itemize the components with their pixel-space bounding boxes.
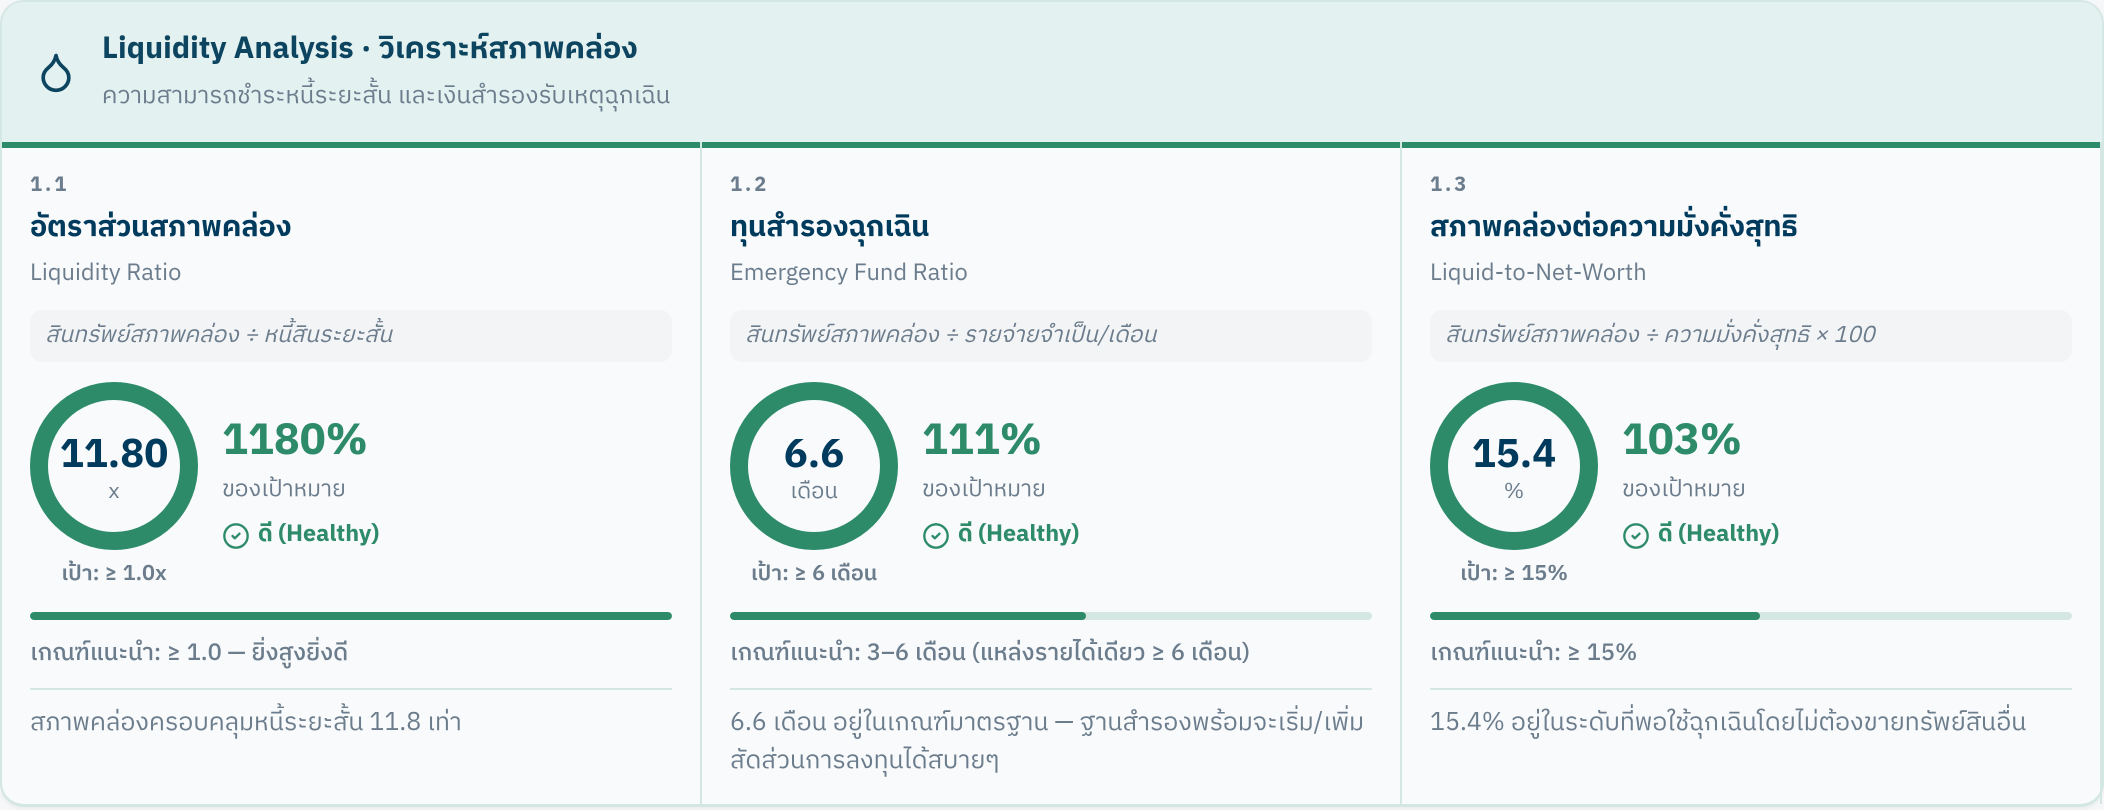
progress bar: [1430, 612, 2072, 620]
gauge value: 6.6: [784, 423, 844, 489]
formula: สินทรัพย์สภาพคล่อง ÷ ความมั่งคั่งสุทธิ × 100: [1445, 317, 1875, 355]
icon: check circle: [923, 523, 949, 549]
english name: Emergency Fund Ratio: [730, 254, 968, 293]
header band: [2, 2, 2102, 148]
status: ดี (Healthy): [258, 516, 379, 554]
gauge unit: %: [1504, 473, 1524, 510]
percent caption: ของเป้าหมาย: [222, 471, 346, 509]
icon: check circle: [223, 523, 249, 549]
status: ดี (Healthy): [958, 516, 1079, 554]
percent caption: ของเป้าหมาย: [1622, 471, 1746, 509]
formula box: [730, 310, 1372, 362]
target: เป้า: ≥ 1.0x: [61, 556, 167, 592]
gauge unit: เดือน: [790, 473, 838, 510]
note: 6.6 เดือน อยู่ในเกณฑ์มาตรฐาน — ฐานสำรองพร้อมจะเริ่ม/เพิ่มสัดส่วนการลงทุนได้สบายๆ: [730, 703, 1364, 782]
progress bar: [30, 612, 672, 620]
metric number: 1.1: [30, 168, 69, 202]
percent caption: ของเป้าหมาย: [922, 471, 1046, 509]
guideline: เกณฑ์แนะนำ: ≥ 15%: [1430, 634, 1637, 673]
status: ดี (Healthy): [1658, 516, 1779, 554]
target: เป้า: ≥ 6 เดือน: [751, 556, 877, 592]
metric heading: สภาพคล่องต่อความมั่งคั่งสุทธิ: [1430, 205, 1798, 252]
metric heading: ทุนสำรองฉุกเฉิน: [730, 205, 929, 252]
panel: liquidity ratio: [30, 168, 672, 744]
note: สภาพคล่องครอบคลุมหนี้ระยะสั้น 11.8 เท่า: [30, 703, 462, 744]
title: Liquidity Analysis · วิเคราะห์สภาพคล่อง: [102, 25, 638, 75]
progress bar: [730, 612, 1372, 620]
icon: check circle: [1623, 523, 1649, 549]
gauge unit: x: [108, 473, 120, 510]
gauge ring: [30, 382, 198, 550]
metric number: 1.3: [1430, 168, 1469, 202]
gauge ring: [1430, 382, 1598, 550]
formula: สินทรัพย์สภาพคล่อง ÷ รายจ่ายจำเป็น/เดือน: [745, 317, 1156, 355]
english name: Liquid-to-Net-Worth: [1430, 254, 1647, 293]
note: 15.4% อยู่ในระดับที่พอใช้ฉุกเฉินโดยไม่ต้องขายทรัพย์สินอื่น: [1430, 703, 2026, 744]
gauge value: 11.80: [60, 423, 168, 489]
percent of target: 111%: [922, 407, 1042, 478]
percent of target: 103%: [1622, 407, 1742, 478]
gauge value: 15.4: [1472, 423, 1556, 489]
subtitle: ความสามารถชำระหนี้ระยะสั้น และเงินสำรองรับเหตุฉุกเฉิน: [102, 76, 670, 116]
formula box: [1430, 310, 2072, 362]
panel: liquid to net worth: [1430, 168, 2072, 744]
formula: สินทรัพย์สภาพคล่อง ÷ หนี้สินระยะสั้น: [45, 317, 392, 355]
metric number: 1.2: [730, 168, 769, 202]
icon: water drop: [41, 54, 71, 92]
panel: emergency fund ratio: [730, 168, 1372, 782]
gauge ring: [730, 382, 898, 550]
percent of target: 1180%: [222, 407, 368, 478]
guideline: เกณฑ์แนะนำ: 3–6 เดือน (แหล่งรายได้เดียว ≥ 6 เดือน): [730, 634, 1250, 673]
formula box: [30, 310, 672, 362]
target: เป้า: ≥ 15%: [1460, 556, 1568, 592]
guideline: เกณฑ์แนะนำ: ≥ 1.0 — ยิ่งสูงยิ่งดี: [30, 634, 348, 673]
metric heading: อัตราส่วนสภาพคล่อง: [30, 205, 292, 252]
english name: Liquidity Ratio: [30, 254, 181, 293]
